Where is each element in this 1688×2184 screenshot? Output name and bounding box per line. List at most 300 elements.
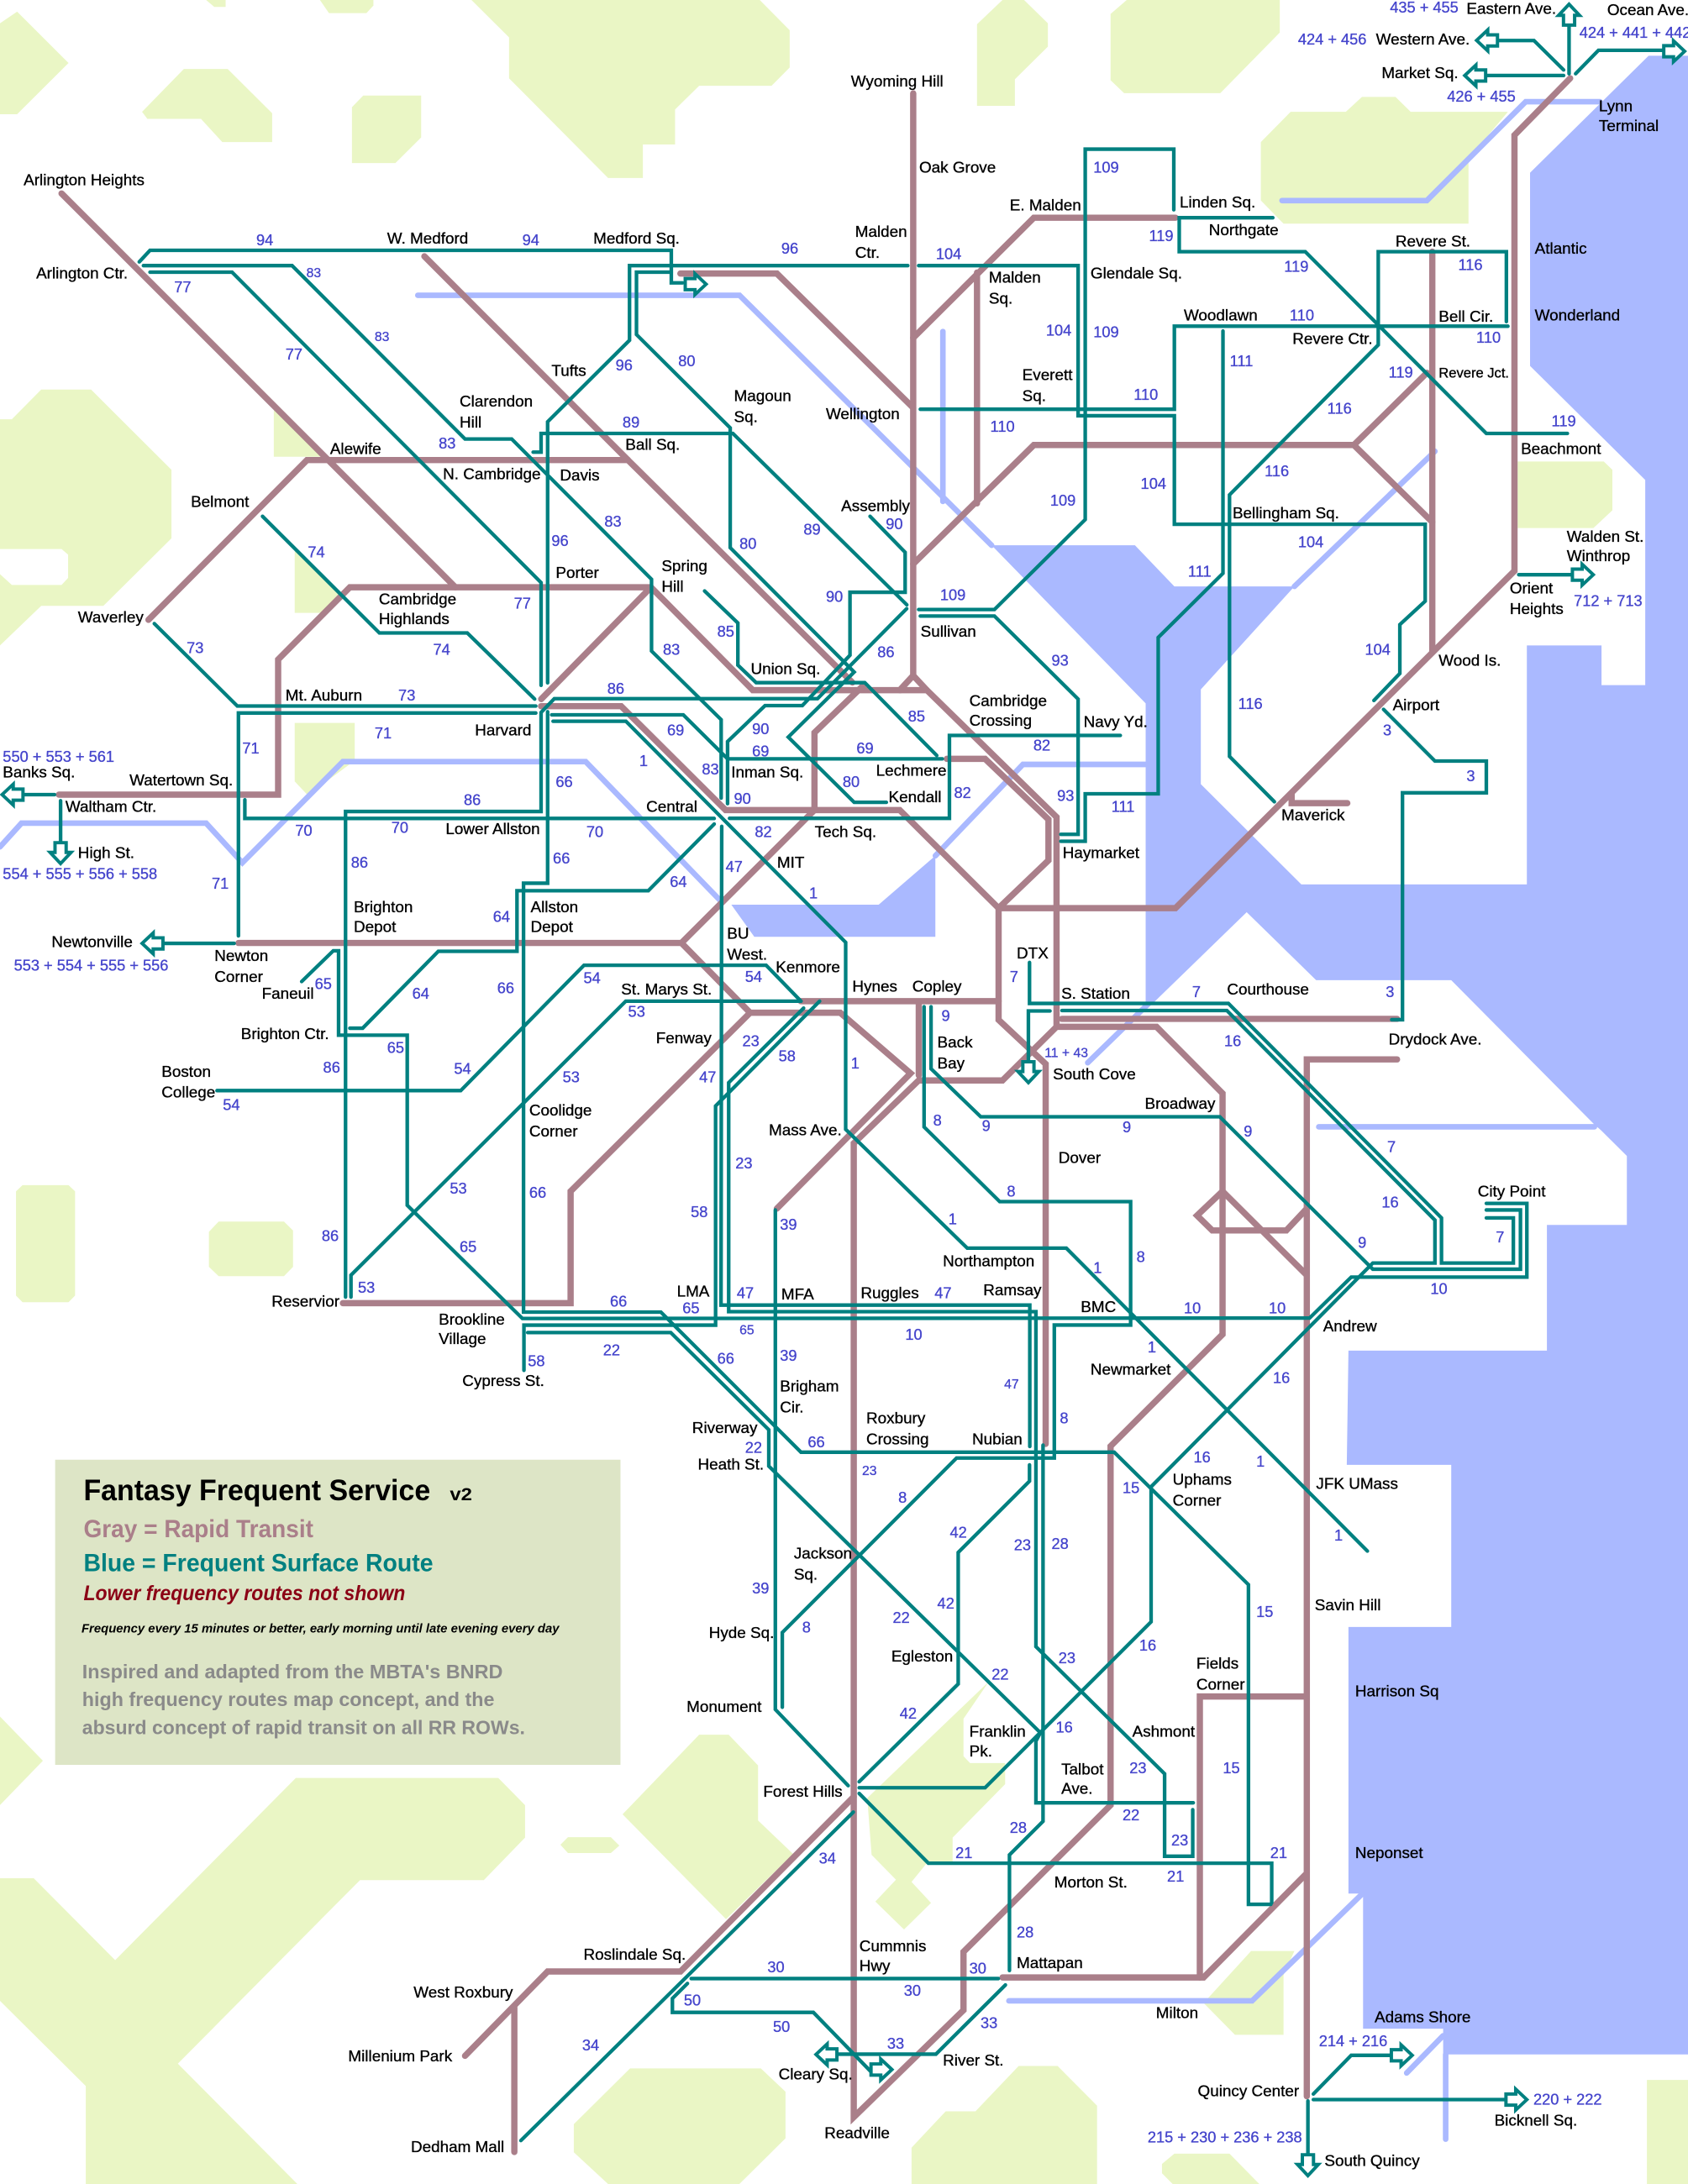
route number labels: 53 (563, 1068, 580, 1085)
station labels: Cir. (780, 1399, 804, 1416)
route number labels: 28 (1010, 1819, 1027, 1836)
route number labels: 64 (670, 873, 687, 890)
arrow: Walden St. Winthrop (1572, 564, 1593, 585)
legend version: v2 (450, 1483, 472, 1504)
station labels: Talbot (1061, 1761, 1104, 1779)
route number labels: 54 (223, 1096, 239, 1114)
route number labels: 426 + 455 (1447, 87, 1516, 105)
route number labels: 34 (582, 2036, 599, 2054)
station labels: Harrison Sq (1355, 1683, 1438, 1701)
route number labels: 39 (752, 1579, 769, 1597)
route number labels: 3 (1386, 983, 1394, 1000)
station labels: Hynes (852, 979, 897, 996)
route 80 (637, 272, 886, 802)
station labels: College (161, 1084, 215, 1102)
route number labels: 23 (735, 1154, 752, 1172)
route number labels: 424 + 441 + 442 (1580, 24, 1688, 41)
route number labels: 119 (1149, 227, 1174, 244)
route number labels: 83 (375, 330, 390, 344)
station labels: Monument (686, 1698, 762, 1716)
station labels: Ashmont (1133, 1724, 1196, 1741)
station labels: Inman Sq. (731, 764, 803, 781)
route number labels: 554 + 555 + 556 + 558 (3, 864, 157, 882)
station labels: Bicknell Sq. (1495, 2112, 1577, 2129)
route 23 (728, 1008, 1193, 1856)
station labels: Malden (989, 270, 1041, 287)
route number labels: 82 (954, 784, 971, 801)
station labels: Kendall (889, 789, 942, 806)
station labels: Bell Cir. (1438, 308, 1493, 326)
route number labels: 116 (1328, 399, 1352, 417)
station labels: Revere St. (1396, 233, 1470, 250)
route 89 (534, 433, 907, 605)
station labels: Malden (855, 223, 907, 241)
route 85 (705, 591, 937, 755)
route number labels: 110 (1476, 328, 1501, 346)
route number labels: 119 (1552, 412, 1576, 429)
station labels: Ave. (1061, 1781, 1093, 1798)
route number labels: 64 (493, 908, 510, 926)
station labels: Quincy Center (1198, 2083, 1299, 2101)
station labels: Navy Yd. (1084, 714, 1148, 732)
station labels: Cummnis (860, 1938, 926, 1956)
route number labels: 22 (745, 1438, 762, 1456)
routes 65 and 10 (302, 951, 1527, 1319)
route number labels: 50 (684, 1992, 701, 2009)
route 28 (1009, 1445, 1043, 1971)
station labels: LMA (677, 1284, 710, 1301)
route number labels: 96 (781, 239, 798, 257)
legend panel (55, 1460, 620, 1765)
route 83 (144, 265, 721, 798)
route 21 (860, 1793, 1272, 1903)
station labels: Depot (531, 918, 574, 936)
route number labels: 70 (295, 822, 313, 839)
legend: frequency note: Frequency every 15 minutes or better, early morning until late evening every day (82, 1621, 560, 1635)
station labels: Belmont (191, 494, 250, 512)
station labels: Sullivan (921, 623, 976, 641)
station labels: Alewife (330, 441, 381, 459)
station labels: Revere Ctr. (1292, 331, 1373, 349)
route 22 (528, 1332, 1193, 1803)
station labels: Kenmore (776, 958, 840, 976)
station labels: Beachmont (1521, 441, 1601, 459)
station labels: Walden St. (1567, 528, 1643, 546)
route number labels: 23 (862, 1464, 877, 1478)
station labels: Milton (1156, 2005, 1198, 2023)
route 1 (553, 722, 1367, 1551)
route number labels: 74 (308, 543, 325, 560)
route number labels: 77 (174, 278, 191, 296)
station labels: Linden Sq. (1180, 194, 1255, 212)
route number labels: 28 (1051, 1535, 1069, 1552)
station labels: Newton (214, 948, 268, 965)
route number labels: 104 (1298, 533, 1323, 551)
station labels: Corner (1173, 1492, 1221, 1509)
station labels: MFA (781, 1286, 814, 1304)
station labels: Eastern Ave. (1466, 1, 1556, 18)
station labels: Sq. (1023, 388, 1046, 406)
route number labels: 110 (991, 417, 1015, 435)
station labels: Riverway (692, 1420, 758, 1437)
route number labels: 104 (1141, 475, 1166, 492)
route number labels: 86 (607, 680, 624, 697)
route number labels: 71 (212, 874, 229, 892)
station labels: Mattapan (1017, 1955, 1083, 1972)
route number labels: 21 (1270, 1844, 1287, 1861)
route number labels: 70 (586, 823, 603, 841)
route number labels: 69 (667, 722, 684, 739)
station labels: Corner (214, 969, 263, 986)
route number labels: 16 (1381, 1194, 1399, 1211)
station labels: Savin Hill (1315, 1597, 1380, 1614)
route number labels: 23 (1171, 1831, 1188, 1849)
station labels: Union Sq. (750, 661, 820, 679)
station labels: Northgate (1209, 222, 1279, 239)
route number labels: 86 (322, 1226, 339, 1244)
route number labels: 90 (752, 720, 769, 738)
route number labels: 89 (623, 413, 639, 431)
route number labels: 10 (1269, 1299, 1286, 1317)
station labels: Revere Jct. (1438, 365, 1509, 381)
station labels: Egleston (891, 1648, 953, 1666)
route number labels: 220 + 222 (1533, 2090, 1602, 2108)
route 33 (833, 1985, 1006, 2054)
route 77 (150, 272, 541, 685)
station labels: Faneuil (262, 985, 314, 1003)
arrow: Ocean Ave. (1664, 41, 1685, 61)
station labels: Mass Ave. (769, 1121, 842, 1139)
route number labels: 215 + 230 + 236 + 238 (1148, 2128, 1302, 2145)
route number labels: 10 (905, 1326, 923, 1343)
route number labels: 71 (375, 724, 392, 742)
route 424 + 456 line (1493, 40, 1564, 70)
station labels: Nubian (972, 1431, 1023, 1449)
route number labels: 33 (887, 2034, 904, 2052)
station labels: Everett (1023, 367, 1073, 385)
station labels: Clarendon (460, 393, 533, 411)
route number labels: 90 (826, 587, 843, 605)
station labels: Orient (1510, 580, 1554, 597)
station labels: Banks Sq. (3, 764, 75, 781)
route number labels: 1 (639, 752, 648, 769)
route number labels: 47 (934, 1284, 952, 1301)
station labels: S. Station (1061, 985, 1130, 1003)
station labels: Heath St. (697, 1456, 764, 1473)
route number labels: 116 (1265, 462, 1289, 480)
route number labels: 39 (780, 1215, 797, 1233)
route 3 (1384, 710, 1486, 1020)
route number labels: 54 (584, 969, 601, 987)
route 435 + 455 line (1568, 21, 1570, 74)
arrow: Medford Sq. (686, 274, 706, 295)
station labels: Glendale Sq. (1091, 265, 1182, 283)
route number labels: 86 (464, 790, 481, 808)
route number labels: 93 (1051, 652, 1069, 669)
station labels: Woodlawn (1184, 307, 1258, 324)
route number labels: 69 (752, 742, 769, 759)
station labels: Fields (1196, 1655, 1238, 1672)
route number labels: 94 (256, 231, 273, 249)
station labels: Sq. (734, 408, 758, 426)
legend: inspiration credit: high frequency routes map concept, and the (82, 1688, 495, 1710)
route number labels: 15 (1256, 1603, 1273, 1620)
station labels: Hwy (860, 1957, 891, 1975)
station labels: Brighton (354, 899, 413, 916)
route number labels: 66 (553, 849, 570, 867)
legend: inspiration credit: Inspired and adapted from the MBTA's BNRD (82, 1661, 502, 1683)
route number labels: 39 (780, 1347, 797, 1364)
arrow: Bicknell Sq. (1506, 2089, 1527, 2110)
route number labels: 104 (1046, 322, 1071, 339)
route number labels: 74 (434, 640, 450, 658)
route number labels: 34 (819, 1850, 836, 1867)
route 16 (860, 1011, 1435, 1788)
route 110 (920, 326, 1508, 409)
station labels: Lower Allston (445, 821, 540, 838)
route number labels: 7 (1010, 968, 1018, 985)
route number labels: 94 (523, 231, 539, 249)
route number labels: 82 (755, 823, 772, 841)
arrow: South Quincy (1297, 2155, 1318, 2176)
station labels: Terminal (1599, 118, 1659, 135)
station labels: Corner (1196, 1676, 1245, 1693)
station labels: High St. (78, 844, 134, 862)
route number labels: 83 (702, 760, 719, 778)
route number labels: 1 (1256, 1452, 1265, 1470)
route number labels: 30 (767, 1958, 785, 1976)
route number labels: 65 (682, 1299, 699, 1317)
route 96 (548, 265, 907, 683)
route 93 (920, 616, 1078, 834)
route number labels: 104 (1365, 640, 1391, 658)
route number labels: 82 (1033, 737, 1050, 754)
station labels: Ramsay (983, 1282, 1042, 1299)
route number labels: 22 (991, 1666, 1008, 1683)
station labels: Crossing (866, 1431, 928, 1449)
station labels: South Quincy (1324, 2152, 1420, 2170)
station labels: Cambridge (379, 591, 456, 609)
station labels: Porter (555, 564, 599, 582)
route number labels: 73 (398, 686, 415, 704)
station labels: Tech Sq. (815, 824, 876, 842)
route number labels: 58 (779, 1047, 796, 1065)
route number labels: 8 (1060, 1410, 1069, 1427)
route 119 (1179, 218, 1567, 433)
route 74 (262, 517, 534, 699)
route number labels: 23 (1129, 1759, 1147, 1777)
route number labels: 54 (745, 968, 762, 985)
station labels: Arlington Heights (24, 172, 145, 190)
route 86 (345, 609, 907, 1297)
route number labels: 66 (718, 1349, 734, 1367)
route number labels: 85 (718, 622, 734, 640)
station labels: Broadway (1145, 1095, 1216, 1113)
station labels: Lechmere (876, 763, 947, 780)
route 553 line (160, 942, 234, 944)
arrow: High St. (50, 843, 71, 864)
route number labels: 77 (286, 345, 302, 363)
water: harbor and Charles River (731, 55, 1688, 2055)
station labels: City Point (1478, 1183, 1546, 1200)
route 90 (728, 517, 905, 804)
station labels: N. Cambridge (443, 465, 541, 483)
route number labels: 42 (949, 1524, 967, 1541)
route 214 + 216 line (1313, 2055, 1393, 2094)
route 7 (1029, 963, 1513, 1263)
arrow: South Cove (1018, 1062, 1039, 1083)
station labels: Franklin (970, 1724, 1026, 1741)
route number labels: 42 (900, 1704, 917, 1722)
route number labels: 65 (387, 1039, 404, 1057)
station labels: Haymarket (1063, 844, 1140, 862)
station labels: Bay (938, 1055, 965, 1073)
station labels: Ocean Ave. (1607, 2, 1688, 19)
station labels: Harvard (475, 722, 531, 740)
station labels: Waverley (78, 609, 144, 627)
route 47 (721, 827, 1030, 1446)
route 82 (729, 736, 1120, 818)
route number labels: 50 (773, 2018, 790, 2035)
station labels: Roxbury (866, 1410, 926, 1428)
route number labels: 90 (734, 790, 751, 807)
route number labels: 53 (628, 1002, 645, 1020)
arrow: Banks Sq. (2, 785, 23, 805)
route number labels: 66 (610, 1292, 627, 1310)
station labels: Market Sq. (1381, 65, 1459, 82)
route number labels: 214 + 216 (1319, 2032, 1387, 2050)
route number labels: 109 (1050, 491, 1075, 509)
route number labels: 33 (981, 2013, 997, 2031)
station labels: Cambridge (970, 693, 1047, 711)
route 215 line (1307, 2101, 1309, 2156)
station labels: Newtonville (51, 934, 133, 952)
station labels: Fenway (656, 1030, 712, 1047)
station labels: Drydock Ave. (1389, 1032, 1481, 1049)
route number labels: 90 (886, 515, 902, 533)
route number labels: 66 (529, 1184, 546, 1201)
route number labels: 73 (187, 639, 203, 657)
route number labels: 104 (936, 244, 961, 262)
station labels: Winthrop (1567, 548, 1630, 565)
station labels: Copley (912, 979, 962, 996)
route 116 (1229, 252, 1507, 801)
arrow: Western Ave. (1476, 30, 1497, 51)
route 9 (931, 1007, 1521, 1269)
station labels: Uphams (1173, 1472, 1232, 1489)
route 69 (552, 715, 943, 759)
station labels: Allston (531, 899, 578, 916)
route 109 (918, 150, 1174, 610)
route number labels: 47 (737, 1284, 754, 1301)
station labels: Cypress St. (462, 1373, 544, 1390)
route number labels: 53 (450, 1179, 467, 1197)
route number labels: 80 (843, 773, 860, 790)
route number labels: 83 (307, 266, 321, 281)
station labels: Wonderland (1535, 307, 1620, 324)
station labels: Coolidge (529, 1102, 592, 1120)
route number labels: 66 (555, 773, 573, 790)
route 58 (524, 1001, 819, 1370)
arrow: Newtonville (142, 933, 163, 954)
station labels: Dedham Mall (411, 2139, 504, 2156)
route number labels: 1 (1148, 1338, 1156, 1356)
station labels: Wyoming Hill (851, 73, 944, 91)
station labels: Courthouse (1227, 981, 1309, 999)
station labels: BMC (1081, 1299, 1116, 1316)
station labels: Andrew (1323, 1318, 1377, 1336)
station labels: Millenium Park (348, 2048, 453, 2066)
station labels: Ruggles (860, 1284, 919, 1302)
route number labels: 9 (1244, 1122, 1252, 1140)
route number labels: 21 (1167, 1867, 1184, 1885)
station labels: Waltham Ctr. (66, 799, 156, 816)
route number labels: 28 (1017, 1924, 1033, 1941)
station labels: Hill (661, 579, 684, 596)
route number labels: 54 (454, 1059, 471, 1077)
station labels: Hill (460, 414, 481, 432)
route number labels: 10 (1184, 1299, 1201, 1317)
legend title: Fantasy Frequent Service (83, 1473, 430, 1507)
station labels: West. (727, 946, 767, 963)
station labels: Oak Grove (919, 160, 996, 177)
route number labels: 83 (663, 640, 680, 658)
route number labels: 66 (497, 979, 514, 996)
route number labels: 66 (807, 1433, 825, 1451)
route number labels: 712 + 713 (1574, 591, 1643, 609)
route 712 + 713 line (1519, 574, 1574, 575)
station labels: W. Medford (387, 230, 468, 248)
station labels: Assembly (841, 498, 911, 516)
route 54 (217, 965, 801, 1090)
route number labels: 7 (1496, 1228, 1504, 1246)
route number labels: 47 (726, 858, 743, 875)
route number labels: 109 (1093, 159, 1119, 176)
station labels: Heights (1510, 601, 1564, 618)
station labels: Western Ave. (1376, 31, 1470, 49)
route number labels: 96 (616, 356, 633, 374)
station labels: Roslindale Sq. (584, 1946, 686, 1964)
route number labels: 9 (1123, 1118, 1131, 1136)
route 424 + 441 + 442 line (1575, 50, 1668, 74)
route number labels: 553 + 554 + 555 + 556 (14, 957, 168, 974)
station labels: Dover (1059, 1150, 1101, 1168)
station labels: Morton St. (1054, 1874, 1128, 1892)
station labels: Medford Sq. (593, 230, 680, 248)
route number labels: 1 (1334, 1526, 1343, 1544)
route 70 (245, 800, 714, 818)
route number labels: 16 (1224, 1032, 1241, 1049)
route number labels: 16 (1273, 1369, 1290, 1387)
station labels: Crossing (970, 712, 1032, 730)
route number labels: 83 (604, 512, 622, 530)
route number labels: 22 (603, 1341, 620, 1358)
station labels: Magoun (734, 388, 791, 406)
route number labels: 65 (739, 1324, 755, 1338)
route number labels: 550 + 553 + 561 (3, 748, 114, 765)
route 220 + 222 line (1313, 2098, 1508, 2101)
station labels: Ball Sq. (625, 437, 680, 454)
station labels: Readville (824, 2124, 890, 2142)
route 111 (1061, 331, 1223, 842)
route 94 (139, 250, 682, 283)
station labels: Northampton (943, 1252, 1034, 1270)
route 71 (239, 713, 536, 936)
arrow: Cleary Sq. right (871, 2059, 892, 2080)
station labels: Sq. (794, 1566, 818, 1583)
arrow: Cleary Sq. left (816, 2044, 837, 2065)
station labels: Hyde Sq. (709, 1625, 774, 1642)
